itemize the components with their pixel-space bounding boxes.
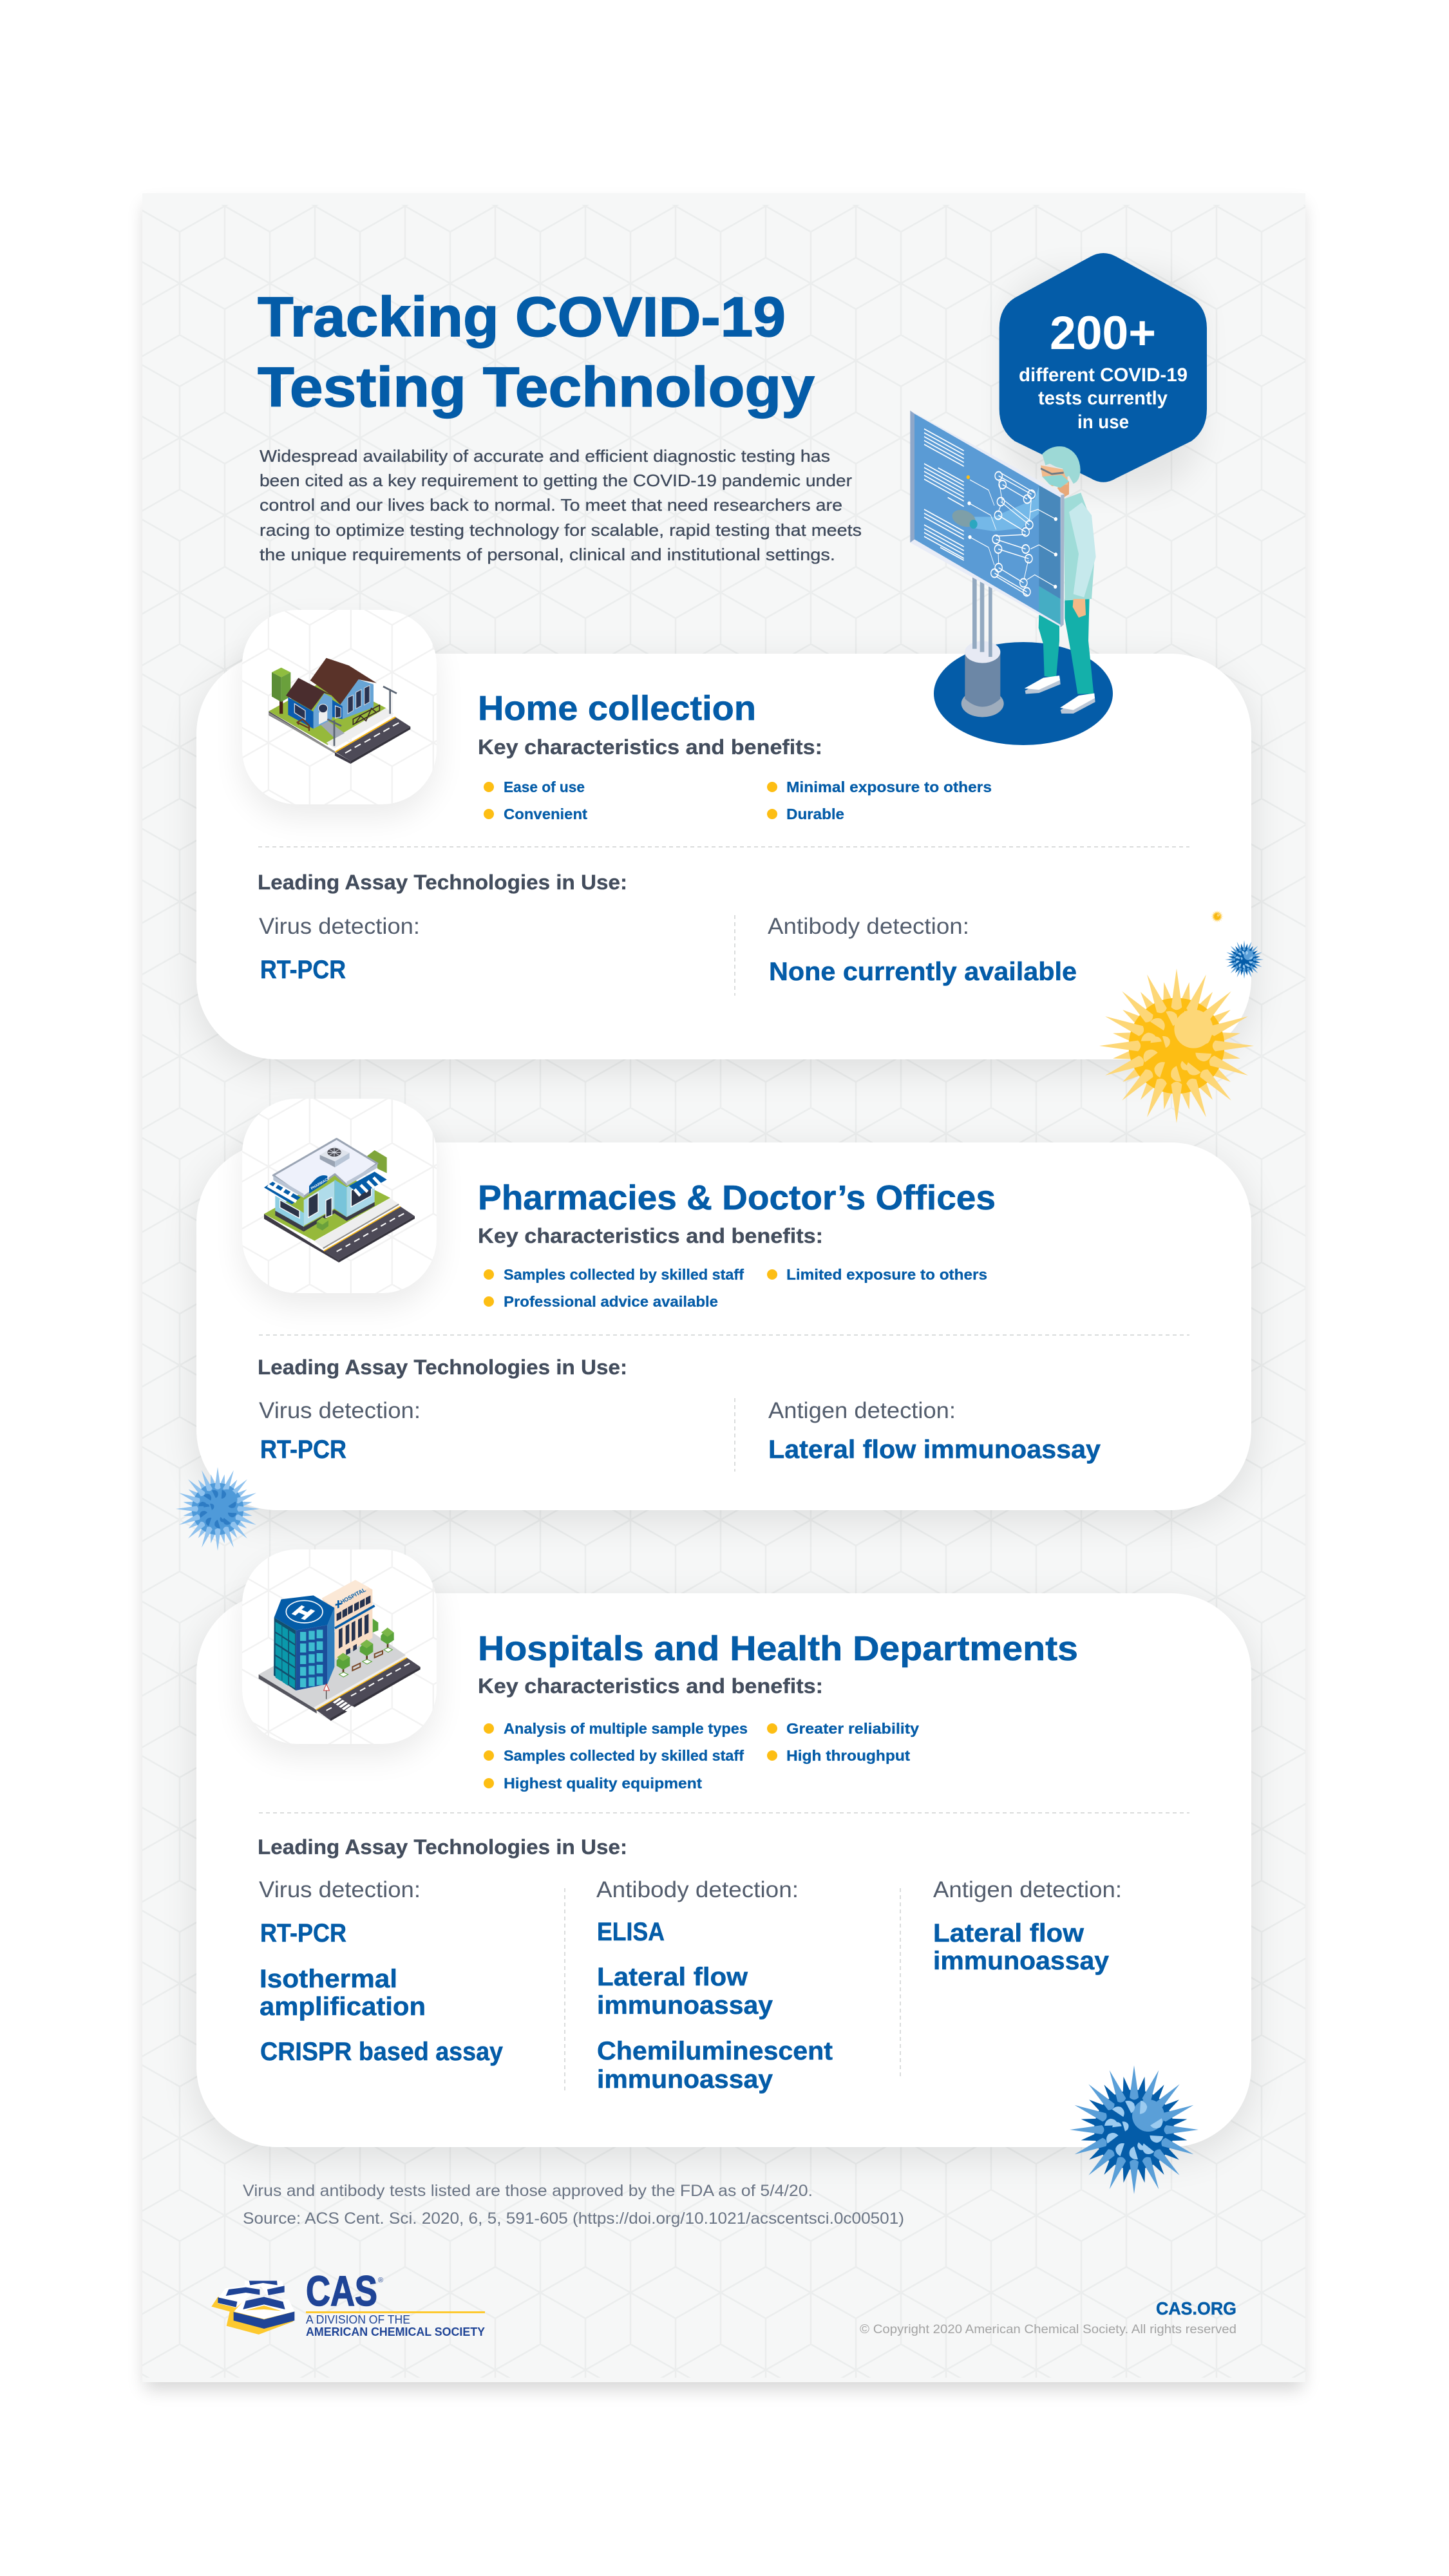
- virus: large blue: [1043, 2039, 1225, 2221]
- bullet list: Convenient: [504, 806, 587, 822]
- column: virus detection: amplification: [260, 1993, 426, 2021]
- logo: CAS: AMERICAN CHEMICAL SOCIETY: [306, 2325, 485, 2338]
- intro paragraph: been cited as a key requirement to getting the COVID-19 pandemic under: [260, 471, 852, 490]
- bullet list: Analysis of multiple sample types: [504, 1720, 748, 1737]
- column: virus detection: RT-PCR: [260, 1919, 346, 1947]
- illustration: scientist at DNA screen: [910, 411, 1113, 745]
- column: virus detection: RT-PCR: [260, 956, 346, 984]
- heading: Hospitals and Health Departments: [478, 1629, 1078, 1668]
- column: virus detection: Virus detection:: [259, 1398, 421, 1423]
- title: Tracking COVID-19: [258, 286, 786, 348]
- bullet list: Samples collected by skilled staff: [504, 1747, 744, 1764]
- panel: hospitals and health departments: [196, 1549, 1251, 2147]
- bullet list: Samples collected by skilled staff: [504, 1266, 744, 1283]
- bullet list: Minimal exposure to others: [786, 779, 992, 795]
- badge: 200+ tests: different COVID-19: [1019, 365, 1188, 386]
- column: antigen detection: [768, 1398, 1101, 1464]
- column: antibody detection: [768, 914, 1077, 986]
- title: Testing Technology: [258, 356, 815, 419]
- virus: medium light blue: [158, 1450, 277, 1568]
- intro paragraph: racing to optimize testing technology for scalable, rapid testing that meets: [260, 520, 862, 540]
- column: antigen detection: Lateral flow immunoassay: [768, 1435, 1101, 1464]
- heading: Home collection: [478, 689, 756, 728]
- column: antibody detection: Chemiluminescent: [597, 2037, 833, 2065]
- column: virus detection: [259, 1398, 421, 1464]
- virus: tiny yellow: [1208, 907, 1226, 925]
- logo: CAS: CAS: [306, 2267, 377, 2315]
- assay heading: Leading Assay Technologies in Use:: [258, 1356, 627, 1379]
- column: antigen detection: Lateral flow: [933, 1919, 1084, 1947]
- intro paragraph: the unique requirements of personal, clinical and institutional settings.: [260, 545, 835, 564]
- intro paragraph: Widespread availability of accurate and efficient diagnostic testing has: [260, 446, 830, 466]
- subheading: Key characteristics and benefits:: [478, 1674, 823, 1698]
- website and copyright: [860, 2298, 1236, 2336]
- column: antigen detection: immunoassay: [933, 1947, 1110, 1975]
- badge: 200+ tests: tests currently: [1038, 388, 1168, 409]
- column: virus detection: Virus detection:: [259, 1877, 421, 1902]
- logo: CAS: A DIVISION OF THE: [306, 2313, 410, 2326]
- badge: 200+ tests: [999, 253, 1207, 482]
- subheading: Key characteristics and benefits:: [478, 1224, 823, 1247]
- column: virus detection: Isothermal: [260, 1965, 397, 1993]
- bullet list: Durable: [786, 806, 844, 822]
- bullet list: Ease of use: [504, 779, 585, 795]
- intro paragraph: control and our lives back to normal. To meet that need researchers are: [260, 495, 842, 515]
- badge: 200+ tests: in use: [1077, 412, 1129, 433]
- bullet list: [484, 1720, 919, 1792]
- footnotes: Source: ACS Cent. Sci. 2020, 6, 5, 591-605 (https://doi.org/10.1021/acscentsci.0c00501): [243, 2210, 904, 2228]
- subheading: Key characteristics and benefits:: [478, 735, 822, 759]
- bullet list: Limited exposure to others: [786, 1266, 987, 1283]
- assay heading: Leading Assay Technologies in Use:: [258, 871, 627, 894]
- icon tile: pharmacy: PHARMACY: [310, 1177, 330, 1191]
- column: antibody detection: None currently available: [769, 958, 1077, 986]
- column: virus detection: Virus detection:: [259, 914, 420, 939]
- logo: CAS: [211, 2267, 485, 2338]
- column: antigen detection: Antigen detection:: [768, 1398, 956, 1423]
- bullet list: Highest quality equipment: [504, 1775, 702, 1792]
- column: virus detection: RT-PCR: [260, 1435, 346, 1464]
- icon tile: house: [242, 610, 437, 804]
- footnotes: [243, 2182, 904, 2228]
- intro paragraph: [260, 446, 862, 564]
- icon tile: hospital: [242, 1549, 437, 1744]
- title: [258, 286, 815, 419]
- virus: small blue: [1217, 933, 1271, 987]
- website and copyright: © Copyright 2020 American Chemical Society. All rights reserved: [860, 2323, 1236, 2336]
- bullet list: Greater reliability: [786, 1720, 919, 1737]
- panel: home collection: [196, 610, 1251, 1059]
- column: virus detection: CRISPR based assay: [260, 2038, 504, 2066]
- assay heading: Leading Assay Technologies in Use:: [258, 1835, 627, 1859]
- column: antibody detection: immunoassay: [597, 2065, 773, 2094]
- icon tile: pharmacy: [242, 1099, 437, 1293]
- footnotes: Virus and antibody tests listed are those approved by the FDA as of 5/4/20.: [243, 2182, 813, 2200]
- bullet list: High throughput: [786, 1747, 910, 1764]
- icon tile: hospital: HOSPITAL: [339, 1586, 367, 1605]
- column: antigen detection: Antigen detection:: [933, 1877, 1122, 1902]
- column: virus detection: [259, 914, 420, 984]
- column: antibody detection: Antibody detection:: [596, 1877, 799, 1902]
- column: antibody detection: ELISA: [597, 1918, 665, 1946]
- column: antibody detection: immunoassay: [597, 1991, 773, 2020]
- logo: CAS: ®: [378, 2277, 383, 2284]
- column: antigen detection: [933, 1877, 1122, 1975]
- panel: pharmacies and doctor's offices: [196, 1099, 1251, 1510]
- column: antibody detection: Lateral flow: [597, 1963, 748, 1991]
- website and copyright: CAS.ORG: [1156, 2298, 1236, 2318]
- column: virus detection: [259, 1877, 504, 2066]
- bullet list: [484, 1266, 987, 1310]
- bullet list: Professional advice available: [504, 1293, 718, 1310]
- column: antibody detection: [596, 1877, 833, 2094]
- badge: 200+ tests: 200+: [1050, 307, 1156, 359]
- bullet list: [484, 779, 992, 822]
- column: antibody detection: Antibody detection:: [768, 914, 969, 939]
- page background with shadow: [142, 193, 1305, 2389]
- virus: large yellow: [1067, 936, 1286, 1155]
- heading: Pharmacies & Doctor’s Offices: [478, 1179, 996, 1217]
